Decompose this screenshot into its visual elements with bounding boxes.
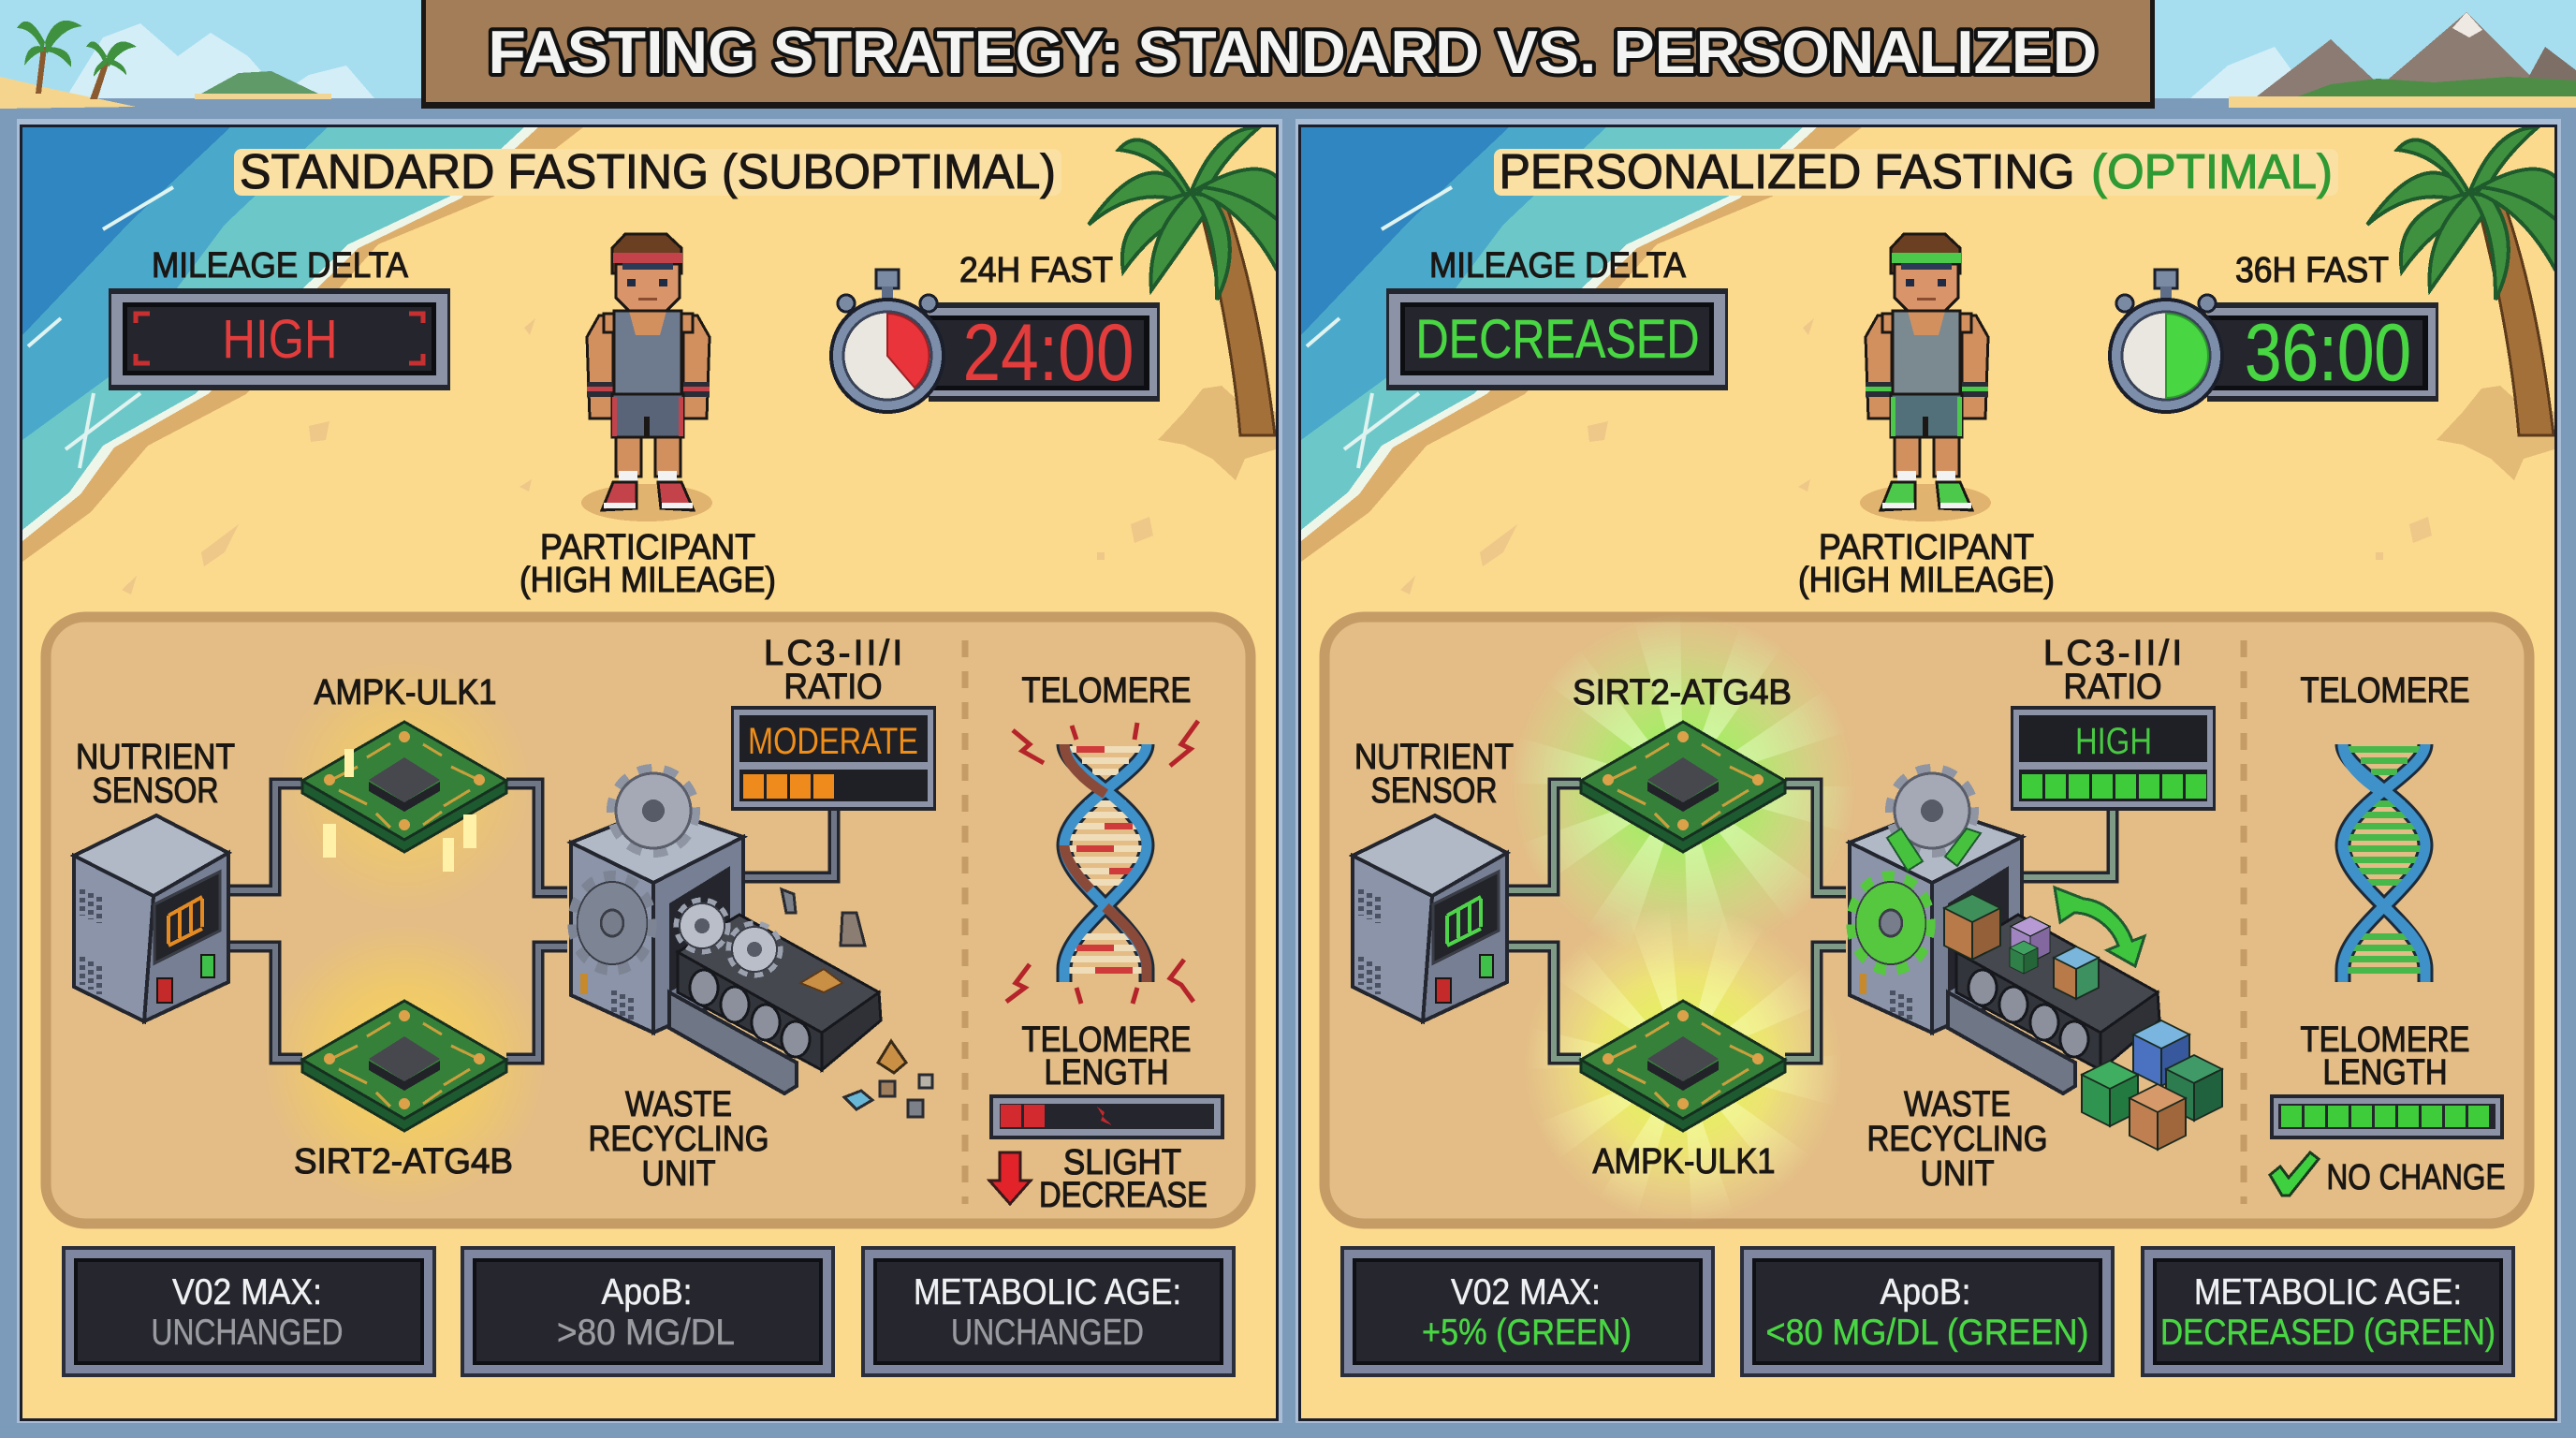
check mark icon: [2270, 1152, 2319, 1196]
LC3 ratio label: RATIO: [784, 668, 882, 707]
mileage delta label: MILEAGE DELTA: [152, 246, 409, 286]
LC3 ratio label: [764, 634, 902, 707]
fast duration label: 36H FAST: [2235, 251, 2389, 290]
chip: SIRT2-ATG4B: [1581, 722, 1785, 852]
mileage delta display: DECREASED: [1415, 309, 1700, 370]
fast duration label: 24H FAST: [959, 251, 1113, 290]
stopwatch timer: 24:00: [962, 308, 1134, 398]
waste recycling label: UNIT: [642, 1154, 715, 1194]
metric: VO2 max: [1340, 1246, 1715, 1377]
LC3 ratio gauge: MODERATE: [748, 721, 918, 762]
chip: AMPK-ULK1: [302, 722, 506, 872]
down arrow icon: [989, 1152, 1031, 1204]
LC3 ratio gauge: HIGH: [2075, 721, 2152, 762]
telomere length label: LENGTH: [1045, 1053, 1168, 1093]
DNA helix intact: [2342, 744, 2426, 982]
stopwatch timer: 36:00: [2245, 308, 2411, 398]
metric: metabolic age: [861, 1246, 1236, 1377]
slight decrease label: DECREASE: [1039, 1176, 1208, 1215]
telomere length bar: [989, 1094, 1224, 1139]
stopwatch timer: [831, 270, 1160, 412]
nutrient sensor label: [1354, 738, 1514, 811]
telomere length label: TELOMERE: [2301, 1020, 2469, 1060]
left island: [195, 71, 331, 99]
participant label: PARTICIPANT: [1819, 528, 2034, 567]
LC3 ratio gauge: [731, 706, 936, 811]
metric: VO2 max: V02 MAX:: [1451, 1272, 1601, 1313]
recycled boxes on conveyor: [1944, 894, 2099, 999]
chip: AMPK-ULK1: [1581, 1001, 1785, 1131]
LC3 ratio label: LC3-II/I: [764, 634, 902, 673]
section heading: (OPTIMAL): [2091, 145, 2333, 199]
waste recycling label: WASTE: [625, 1085, 732, 1124]
nutrient sensor icon: [1353, 815, 1507, 1021]
LC3 ratio label: RATIO: [2063, 668, 2162, 707]
metric: VO2 max: UNCHANGED: [152, 1313, 343, 1353]
metric: metabolic age: METABOLIC AGE:: [914, 1272, 1181, 1313]
stopwatch timer: [2110, 270, 2438, 412]
slight decrease label: [1039, 1143, 1208, 1215]
title banner: [421, 0, 2155, 109]
metric: ApoB: [1740, 1246, 2115, 1377]
panel: personalized fasting: [1295, 119, 2561, 1423]
metric: VO2 max: [62, 1246, 436, 1377]
metric: VO2 max: +5% (GREEN): [1422, 1313, 1632, 1353]
metric: metabolic age: METABOLIC AGE:: [2194, 1272, 2462, 1313]
nutrient sensor label: NUTRIENT: [1354, 738, 1514, 777]
nutrient sensor label: SENSOR: [92, 771, 219, 811]
metric: ApoB: [461, 1246, 835, 1377]
waste recycling label: RECYCLING: [1866, 1120, 2048, 1159]
metric: metabolic age: [2141, 1246, 2515, 1377]
no change label: NO CHANGE: [2327, 1158, 2505, 1197]
participant figure: [581, 234, 712, 521]
chip: SIRT2-ATG4B: [302, 1001, 506, 1131]
panel: standard fasting: [17, 119, 1282, 1423]
chip label: SIRT2-ATG4B: SIRT2-ATG4B: [1573, 673, 1792, 712]
waste recycling label: RECYCLING: [588, 1120, 769, 1159]
DNA helix with damage: [1006, 721, 1198, 1004]
waste recycling label: [588, 1085, 769, 1194]
mileage delta label: MILEAGE DELTA: [1429, 246, 1687, 286]
waste recycling machine: [571, 771, 932, 1117]
chip glow: [264, 660, 545, 1205]
chip label: AMPK-ULK1: AMPK-ULK1: [315, 673, 496, 712]
telomere length bar: [2270, 1094, 2504, 1139]
LC3 ratio label: LC3-II/I: [2043, 634, 2182, 673]
left shore with palms: [0, 21, 137, 109]
telomere length label: [1022, 1020, 1191, 1093]
telomere length label: TELOMERE: [1022, 1020, 1191, 1060]
slight decrease label: SLIGHT: [1063, 1143, 1181, 1182]
participant label: [520, 528, 776, 600]
participant label: [1798, 528, 2055, 600]
nutrient sensor label: NUTRIENT: [76, 738, 235, 777]
participant label: PARTICIPANT: [540, 528, 755, 567]
green recycle arrow: [2055, 888, 2144, 966]
metric: ApoB: ApoB:: [601, 1272, 693, 1313]
LC3 ratio gauge: [2011, 706, 2216, 811]
participant label: (HIGH MILEAGE): [1798, 561, 2055, 600]
metric: ApoB: ApoB:: [1880, 1272, 1971, 1313]
telomere length label: [2301, 1020, 2469, 1093]
LC3 ratio label: [2043, 634, 2182, 707]
telomere label: TELOMERE: [1022, 671, 1191, 711]
section heading: PERSONALIZED FASTING: [1500, 145, 2074, 199]
mileage delta display: [1386, 288, 1728, 390]
waste recycling label: UNIT: [1921, 1154, 1994, 1194]
top gear green arrows: [1887, 829, 1981, 871]
panel: autophagy pathway: [1325, 613, 2529, 1224]
mileage delta display: HIGH: [223, 309, 337, 370]
section heading: STANDARD FASTING (SUBOPTIMAL): [240, 145, 1056, 199]
nutrient sensor label: [76, 738, 235, 811]
nutrient sensor label: SENSOR: [1370, 771, 1498, 811]
participant label: (HIGH MILEAGE): [520, 561, 776, 600]
telomere label: TELOMERE: [2301, 671, 2469, 711]
metric: ApoB: >80 MG/DL: [557, 1313, 735, 1353]
waste debris: [782, 889, 932, 1117]
telomere length label: LENGTH: [2323, 1053, 2447, 1093]
metric: metabolic age: UNCHANGED: [951, 1313, 1144, 1353]
metric: ApoB: <80 MG/DL (GREEN): [1765, 1313, 2089, 1353]
right mountains: [2229, 12, 2576, 108]
waste recycling machine: [1850, 771, 2222, 1150]
metric: VO2 max: V02 MAX:: [172, 1272, 322, 1313]
recycled cubes pile: [2082, 1020, 2222, 1150]
chip label: SIRT2-ATG4B: SIRT2-ATG4B: [294, 1142, 513, 1181]
chip label: AMPK-ULK1: AMPK-ULK1: [1593, 1142, 1775, 1181]
waste recycling label: WASTE: [1904, 1085, 2011, 1124]
participant figure: [1860, 234, 1991, 521]
chip glow and rays: [1510, 613, 1856, 1224]
title text: FASTING STRATEGY: STANDARD VS. PERSONALIZED: [489, 18, 2097, 86]
mileage delta display: [109, 288, 450, 390]
waste recycling label: [1866, 1085, 2048, 1194]
metric: metabolic age: DECREASED (GREEN): [2160, 1313, 2496, 1353]
nutrient sensor icon: [74, 815, 228, 1021]
panel: autophagy pathway: [46, 617, 1251, 1224]
